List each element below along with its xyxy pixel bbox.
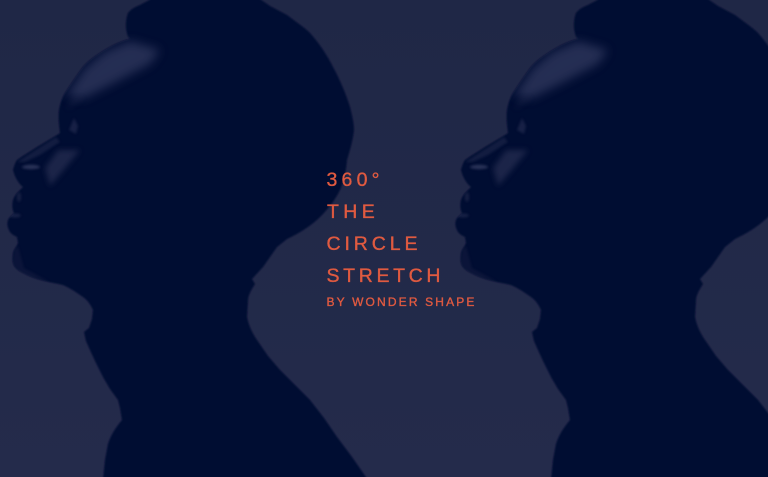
title block <box>326 169 477 309</box>
title line: 360°: 360° <box>326 169 384 191</box>
title line: THE: THE <box>327 201 379 223</box>
left profile silhouette <box>7 0 368 477</box>
right profile silhouette <box>455 0 768 477</box>
title line: STRETCH: STRETCH <box>326 265 444 287</box>
byline: BY WONDER SHAPE <box>326 295 477 309</box>
title line: CIRCLE: CIRCLE <box>326 233 421 255</box>
